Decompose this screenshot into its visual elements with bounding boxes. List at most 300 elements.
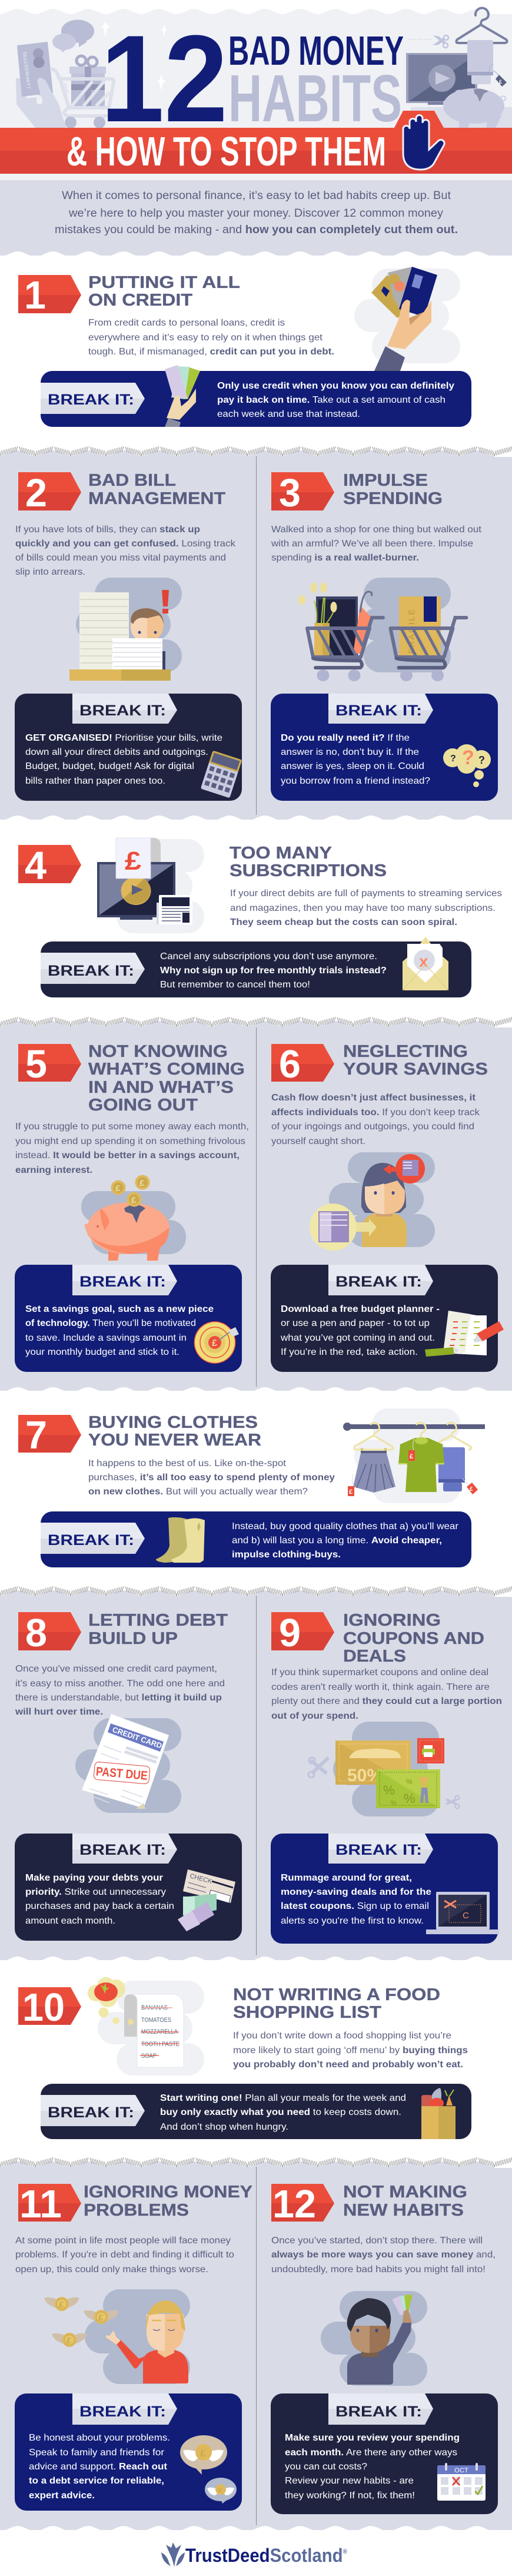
illustration: coupons and scissors: % [406,1778,413,1786]
number badge: 10 [22,1985,65,2030]
icon: thought cloud [443,744,491,787]
text: Speak to family and friends for [29,2448,165,2458]
icon: hand with banknotes [165,365,200,427]
panel: habit 8 [15,1611,242,1941]
illustration: clothes rail [343,1408,485,1503]
heading: YOU NEVER WEAR [88,1431,261,1450]
illustration: past due credit card bill [75,1714,181,1813]
text: Start writing one! Plan all your meals for the week and [160,2093,406,2103]
icon: target: £ [212,1338,217,1348]
icon: envelope: x [419,952,428,970]
number badge: 7 [25,1413,47,1457]
panel: header [0,8,512,180]
body text: you might end up spending it on something frivolous [15,1136,245,1146]
body text [15,1122,249,1175]
heading: NOT MAKING [343,2183,467,2202]
divider: hatch [0,446,512,458]
body text: Walked into a shop for one thing but walked out [271,525,482,535]
body text: At some point in life most people will face money [15,2236,231,2246]
number badge: 2 [25,471,47,515]
text: Why not sign up for free monthly trials instead? [160,966,387,976]
body text [15,525,236,577]
heading [88,1042,245,1115]
heading [88,1413,261,1450]
heading: SHOPPING LIST [233,2003,381,2022]
text: And don’t shop when hungry. [160,2122,288,2132]
illustration: person behind paper stacks [69,578,182,681]
illustration: monitor, bill and newspaper: £ [125,847,142,876]
break it bar [41,2084,471,2139]
icon: envelope [403,937,448,990]
heading: ON CREDIT [88,291,192,310]
label: BREAK IT: [79,1274,166,1290]
body text: there is understandable, but letting it build up [15,1693,222,1703]
heading [343,2183,467,2220]
number badge [18,2182,81,2226]
body text: If you struggle to put some money away each month, [15,1122,249,1132]
text [160,952,387,990]
body text: undoubtedly, more bad habits you might fall into! [271,2265,486,2275]
icon: hand holding credit card: 5512333546T7 [22,51,32,89]
body text [271,525,482,563]
body text: instead. It would be better in a savings account, [15,1151,240,1161]
heading: IGNORING [343,1611,441,1630]
body text: on new clothes. But will you actually wear them? [88,1487,308,1497]
heading [88,273,240,310]
heading: PROBLEMS [84,2201,189,2220]
text: impulse clothing-buys. [232,1550,341,1560]
icon: laptop with coupon: C [463,1911,469,1921]
body text [88,318,334,357]
body text: affects individuals too. If you don’t keep track [271,1108,480,1118]
body text: out of your spend. [271,1711,358,1721]
body text [271,1093,480,1146]
icon: clothes hanger with garment and tag: £ [499,79,502,85]
body text: It happens to the best of us. Like on-the-spot [88,1458,287,1468]
label: BREAK IT: [335,2403,422,2420]
heading: DEALS [343,1647,406,1666]
body text: everywhere and it’s easy to rely on it when things get [88,333,323,343]
body text: If your direct debits are full of payments to streaming services [230,888,502,899]
wordmark: TrustDeedScotland [185,2545,350,2566]
number badge [18,471,81,515]
text: to a debt service for reliable, [29,2476,164,2486]
text: Cancel any subscriptions you don’t use anymore. [160,952,377,962]
heading: COUPONS AND [343,1629,484,1648]
text [281,733,430,786]
illustration: clothes rail: £ [410,1453,413,1460]
heading [88,1611,228,1648]
label: BREAK IT: [79,702,166,719]
body text: problems. If you're in debt and finding it difficult to [15,2250,234,2260]
illustration: coupons and scissors: % [383,1783,395,1798]
text [25,1304,214,1357]
text: Budget, budget, budget! Ask for digital [25,761,194,771]
label: BREAK IT: [48,963,134,979]
heading: SPENDING [343,489,443,508]
text: answer is yes, sleep on it. Could [281,761,424,771]
heading: SUBSCRIPTIONS [230,861,387,880]
panel: habits 11 and 12 background [0,2168,512,2530]
label [41,1523,145,1554]
intro text: we’re here to help you master your money. Discover 12 common money [68,207,444,220]
illustration: past due credit card bill: PAST DUE [95,1765,148,1783]
number badge [18,1042,81,1086]
text: bills rather than paper ones too. [25,776,165,786]
body text: purchases, it’s all too easy to spend plenty of money [88,1473,335,1483]
icon: clothes hanger with garment and tag [456,8,507,87]
label [328,1265,433,1295]
icon: speech bubbles with flying coins: £ [218,2487,222,2494]
icon: cheque and banknotes [178,1869,235,1931]
icon: thought cloud: ? [450,754,456,764]
heading: NOT WRITING A FOOD [233,1985,440,2004]
title: bad money: BAD MONEY [228,28,404,74]
body text: will hurt over time. [15,1707,103,1717]
text: Be honest about your problems. [29,2433,170,2443]
divider: hatch [0,1017,512,1029]
label: BREAK IT: [48,392,134,408]
heading: BAD BILL [88,471,176,490]
break it box [271,694,498,801]
illustration: man and flying coins: £ [67,2336,72,2346]
icon: boots [156,1517,205,1563]
label [72,2393,177,2425]
body text [230,888,502,927]
text [25,1873,174,1926]
heading: TOO MANY [230,844,332,863]
text [285,2433,460,2501]
text: Set a savings goal, such as a new piece [25,1304,214,1314]
illustration: hand holding credit cards [354,267,460,371]
text: each month. Are there any other ways [285,2448,457,2458]
icon: monitor with play button [406,53,477,105]
panel: habit 2 [15,471,242,801]
intro text: mistakes you could be making - and how you can completely cut them out. [55,224,458,236]
heading [343,1042,488,1079]
body text: slip into arrears. [15,567,85,577]
heading: NEGLECTING [343,1042,468,1061]
text: Only use credit when you know you can definitely [217,381,454,391]
text: Instead, buy good quality clothes that a) you’ll wear [232,1521,459,1531]
label [328,694,433,724]
body text: yourself caught short. [271,1136,365,1146]
text: purchases and pay back a certain [25,1901,174,1911]
body text: earning interest. [15,1165,92,1175]
intro text: When it comes to personal finance, it’s easy to let bad habits creep up. But [62,190,451,202]
panel: habit 12 [271,2182,498,2514]
text: But remember to cancel them too! [160,980,310,990]
illustration: piggy bank and coins: £ [115,1183,121,1193]
illustration: clothes rail: £ [349,1488,353,1496]
heading: IMPULSE [343,471,428,490]
list text: TOMATOES [141,2017,171,2024]
icon: cheque and banknotes: CHECK [189,1872,213,1885]
illustration: man and flying coins: £ [98,2313,104,2323]
label: BREAK IT: [79,1842,166,1858]
heading: YOUR SAVINGS [343,1060,488,1079]
text [217,381,454,419]
icon: thistle mark [161,2542,185,2567]
break it box [271,1834,499,1944]
text: expert advice. [29,2491,95,2501]
illustration: man and flying coins [44,2289,190,2384]
text [29,2433,170,2501]
label: BREAK IT: [335,1842,422,1858]
heading [233,1985,440,2022]
text: you can cut costs? [285,2462,367,2472]
number badge [18,1611,81,1655]
label: BREAK IT: [48,2104,134,2121]
title: 12: 12 [101,9,228,148]
body text: If you have lots of bills, they can stack up [15,525,200,535]
body text [233,2031,468,2070]
body text: more likely to start going ‘off menu’ by buying things [233,2045,468,2056]
icon: calendar [437,2463,486,2501]
panel: habit 9 [271,1611,502,1944]
number badge: 5 [25,1042,47,1086]
number badge: 9 [279,1611,301,1655]
illustration: coupons and scissors: 50% [347,1766,383,1785]
number badge: 4 [25,844,46,888]
body text: with an armful? We’ve all been there. Impulse [271,539,473,549]
list text: SOAP [141,2053,157,2060]
body text: of your ingoings and outgoings, you could find [271,1122,474,1132]
break it bar [41,365,471,427]
divider: hatch [0,2157,512,2169]
text: to save. Include a savings amount in [25,1333,187,1343]
text: money-saving deals and for the [281,1887,431,1897]
label [41,953,145,984]
break it box [15,1834,242,1941]
illustration: person holding banknotes [321,2291,427,2386]
text: Make paying your debts your [25,1873,163,1883]
text: down all your direct debits and outgoings. [25,747,208,757]
panel: habit 6 [271,1042,504,1372]
icon: thought cloud: ? [462,747,474,769]
illustration: woman and money in / out [310,1152,435,1251]
panel: habits 2 and 3 background [0,457,512,820]
text [281,1873,431,1926]
body text: They seem cheap but the costs can soon spiral. [230,917,457,927]
label: BREAK IT: [79,2403,166,2420]
illustration: piggy bank and coins: £ [131,1195,137,1205]
icon: target [194,1321,239,1364]
heading: NOT KNOWING [88,1042,228,1061]
text: amount each month. [25,1916,115,1926]
icon: shopping cart with gift [50,56,114,128]
number badge: 12 [272,2182,316,2226]
body text: always be more ways you can save money and, [271,2250,496,2260]
body text: If you think supermarket coupons and online deal [271,1667,488,1677]
heading: PUTTING IT ALL [88,273,240,292]
text: Review your new habits - are [285,2476,414,2486]
list text: MOZZARELLA [141,2028,178,2035]
panel: habit 1 [18,267,471,427]
text: answer is no, don’t buy it. If the [281,747,419,757]
text: Make sure you review your spending [285,2433,460,2443]
icon: speech bubbles [52,20,94,52]
divider: hatch [0,1586,512,1598]
text: they working? If not, fix them! [285,2491,415,2501]
number badge [18,1985,81,2030]
label [41,2095,145,2126]
banner: how to stop them [0,111,512,174]
number badge: 3 [279,471,301,515]
number badge: 1 [24,273,46,317]
icon: laptop with coupon [426,1892,499,1934]
illustration: coupons and scissors: % [404,1791,415,1806]
body text: quickly and you can get confused. Losing track [15,539,236,549]
body text: Once you’ve started, don’t stop there. There will [271,2236,483,2246]
break it box [15,1265,242,1372]
panel: habit 4 [18,838,502,997]
icon: grocery bag [421,2088,456,2139]
body text: codes aren't really worth it, think again. There are [271,1682,490,1692]
number badge [18,1413,81,1457]
text: each week and use that instead. [217,409,360,419]
label [41,383,145,414]
text [232,1521,459,1560]
label [72,1834,177,1864]
illustration: two shopping carts [298,578,466,681]
icon: sparkles [101,22,168,91]
label [328,2393,433,2425]
panel: habits 8 and 9 background [0,1597,512,1960]
icon: thought cloud: ? [478,754,485,766]
number badge: 11 [19,2182,62,2226]
number badge: 8 [25,1611,47,1655]
label: BREAK IT: [335,1274,422,1290]
break it box [271,2393,498,2514]
list text [141,2004,179,2060]
text: Rummage around for great, [281,1873,412,1883]
logo: Trust Deed Scotland [161,2542,347,2567]
heading [88,471,225,508]
number badge [271,1042,334,1086]
body text: and magazines, then you may have too many subscriptions. [230,903,496,913]
text: you borrow from a friend instead? [281,776,430,786]
heading: LETTING DEBT [88,1611,228,1630]
panel: habit 7 [18,1408,485,1567]
text [25,733,222,786]
body text: it’s easy to miss another. The odd one here and [15,1679,225,1689]
intro text [55,190,458,236]
text: what you’ve got coming in and out. [280,1333,435,1343]
heading: IN AND WHAT’S [88,1078,234,1097]
text: priority. Strike out unnecessary [25,1887,166,1897]
body text: you probably don’t need and probably won’t eat. [233,2060,463,2070]
number badge [271,1611,334,1655]
body text [15,2236,234,2275]
body text: Cash flow doesn’t just affect businesses, it [271,1093,476,1103]
body text: of bills could mean you miss vital payments and [15,553,226,563]
heading: MANAGEMENT [88,489,225,508]
icon: speech bubbles with flying coins [180,2435,237,2504]
illustration: man and flying coins: £ [59,2300,64,2310]
text: advice and support. Reach out [29,2462,168,2472]
number badge [271,471,334,515]
body text [88,1458,335,1497]
body text: plenty out there and they could cut a large portion [271,1696,502,1706]
icon: piggy bank [411,88,512,128]
panel: habit 3 [271,471,498,801]
panel: habit 5 [15,1042,249,1372]
break it bar [41,1511,471,1567]
heading [343,1611,484,1666]
break it box [15,2393,242,2511]
illustration: two shopping carts: FRAGILE [407,608,416,654]
body text: tough. But, if mismanaged, credit can put you in debt. [88,347,334,357]
break it box [15,694,242,801]
heading: NEW HABITS [343,2201,464,2220]
heading: IGNORING MONEY [84,2183,252,2202]
text: alerts so you're the first to know. [281,1916,424,1926]
text [160,2093,406,2132]
panel: habit 10 [18,1977,471,2139]
text: pay it back on time. Take out a set amount of cash [217,395,445,405]
text: Do you really need it? If the [281,733,410,743]
icon: calculator [201,751,242,798]
number badge [18,273,81,317]
heading [343,471,443,508]
illustration: piggy bank and coins [81,1175,186,1261]
icon: calendar: OCT [454,2467,468,2474]
body text: If you don’t write down a food shopping list you’re [233,2031,451,2041]
body text: From credit cards to personal loans, credit is [88,318,285,328]
text: Download a free budget planner - [281,1304,440,1314]
wordmark: ® [343,2548,347,2555]
text: your monthly budget and stick to it. [25,1347,179,1357]
icon: scissors and dotted cut line [409,35,448,48]
title: habits: HABITS [228,61,402,135]
text: If you’re in the red, take action. [281,1347,418,1357]
panel: habit 11 [15,2182,252,2511]
illustration: piggy bank and coins: £ [139,1178,145,1188]
list text: BANANAS [141,2004,168,2011]
illustration: past due credit card bill: CREDIT CARD [111,1725,163,1750]
body text: spending is a real wallet-burner. [271,553,419,563]
illustration: monitor, bill and newspaper [97,838,204,933]
number badge: 6 [279,1042,301,1086]
number badge [18,844,81,888]
label [72,1265,177,1295]
text: and b) will last you a long time. Avoid cheaper, [232,1536,442,1546]
heading: BUYING CLOTHES [88,1413,258,1432]
body text [15,1664,225,1717]
heading: BUILD UP [88,1629,178,1648]
body text [271,2236,496,2275]
icon: budget planner with pencils [425,1311,504,1357]
heading [230,844,387,880]
illustration: coupons and scissors: % [390,1799,397,1807]
heading: GOING OUT [88,1096,198,1115]
icon: stop hand [403,115,444,170]
label: BREAK IT: [335,702,422,719]
text [280,1304,440,1357]
label [328,1834,433,1864]
break it box [271,1265,504,1372]
text: latest coupons. Sign up to email [281,1901,429,1911]
heading [84,2183,252,2220]
illustration: shopping list and tomato [88,1977,204,2076]
number badge [271,2182,334,2226]
panel: introduction [0,180,512,256]
illustration: coupons and scissors [308,1722,459,1816]
body text [271,1667,502,1721]
body text: Once you've missed one credit card payment, [15,1664,217,1674]
icon: speech bubbles with flying coins: £ [200,2448,206,2459]
